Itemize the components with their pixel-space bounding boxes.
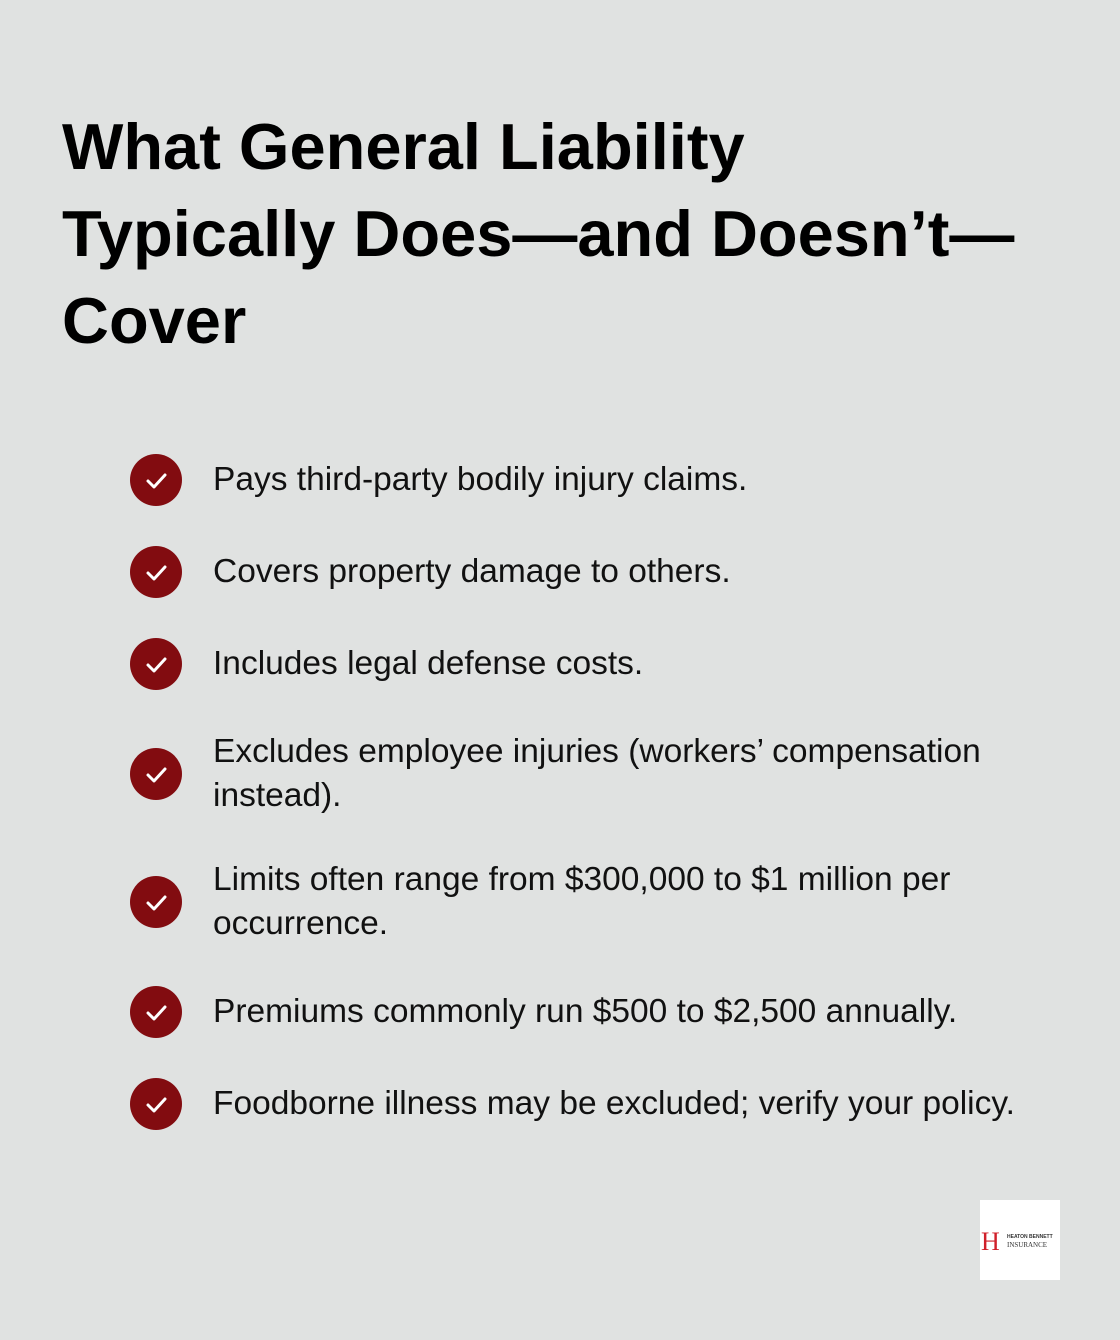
item 2: Covers property damage to others. (213, 553, 731, 590)
icon: check (130, 748, 182, 800)
icon: check (130, 986, 182, 1038)
item 6 (130, 986, 957, 1038)
logo: HEATON BENNETT (1007, 1234, 1053, 1240)
icon: check (130, 638, 182, 690)
icon: check (130, 454, 182, 506)
item 1: Pays third-party bodily injury claims. (213, 461, 747, 498)
item 5: Limits often range from $300,000 to $1 million per occurrence. (213, 861, 950, 942)
item 4: Excludes employee injuries (workers’ compensation instead). (213, 733, 981, 814)
title: Typically Does—and Doesn’t— (62, 197, 1014, 270)
title: What General Liability (62, 110, 745, 183)
logo: H (981, 1227, 1000, 1256)
icon: check (130, 1078, 182, 1130)
logo (980, 1200, 1060, 1280)
item 7: Foodborne illness may be excluded; verify your policy. (213, 1085, 1015, 1122)
icon: check (130, 876, 182, 928)
title: Cover (62, 284, 246, 357)
logo: INSURANCE (1007, 1241, 1047, 1249)
item 1 (130, 454, 747, 506)
item 7 (130, 1078, 1015, 1130)
item 6: Premiums commonly run $500 to $2,500 annually. (213, 993, 957, 1030)
item 3: Includes legal defense costs. (213, 645, 643, 682)
item 3 (130, 638, 643, 690)
item 2 (130, 546, 731, 598)
title (62, 110, 1014, 357)
icon: check (130, 546, 182, 598)
